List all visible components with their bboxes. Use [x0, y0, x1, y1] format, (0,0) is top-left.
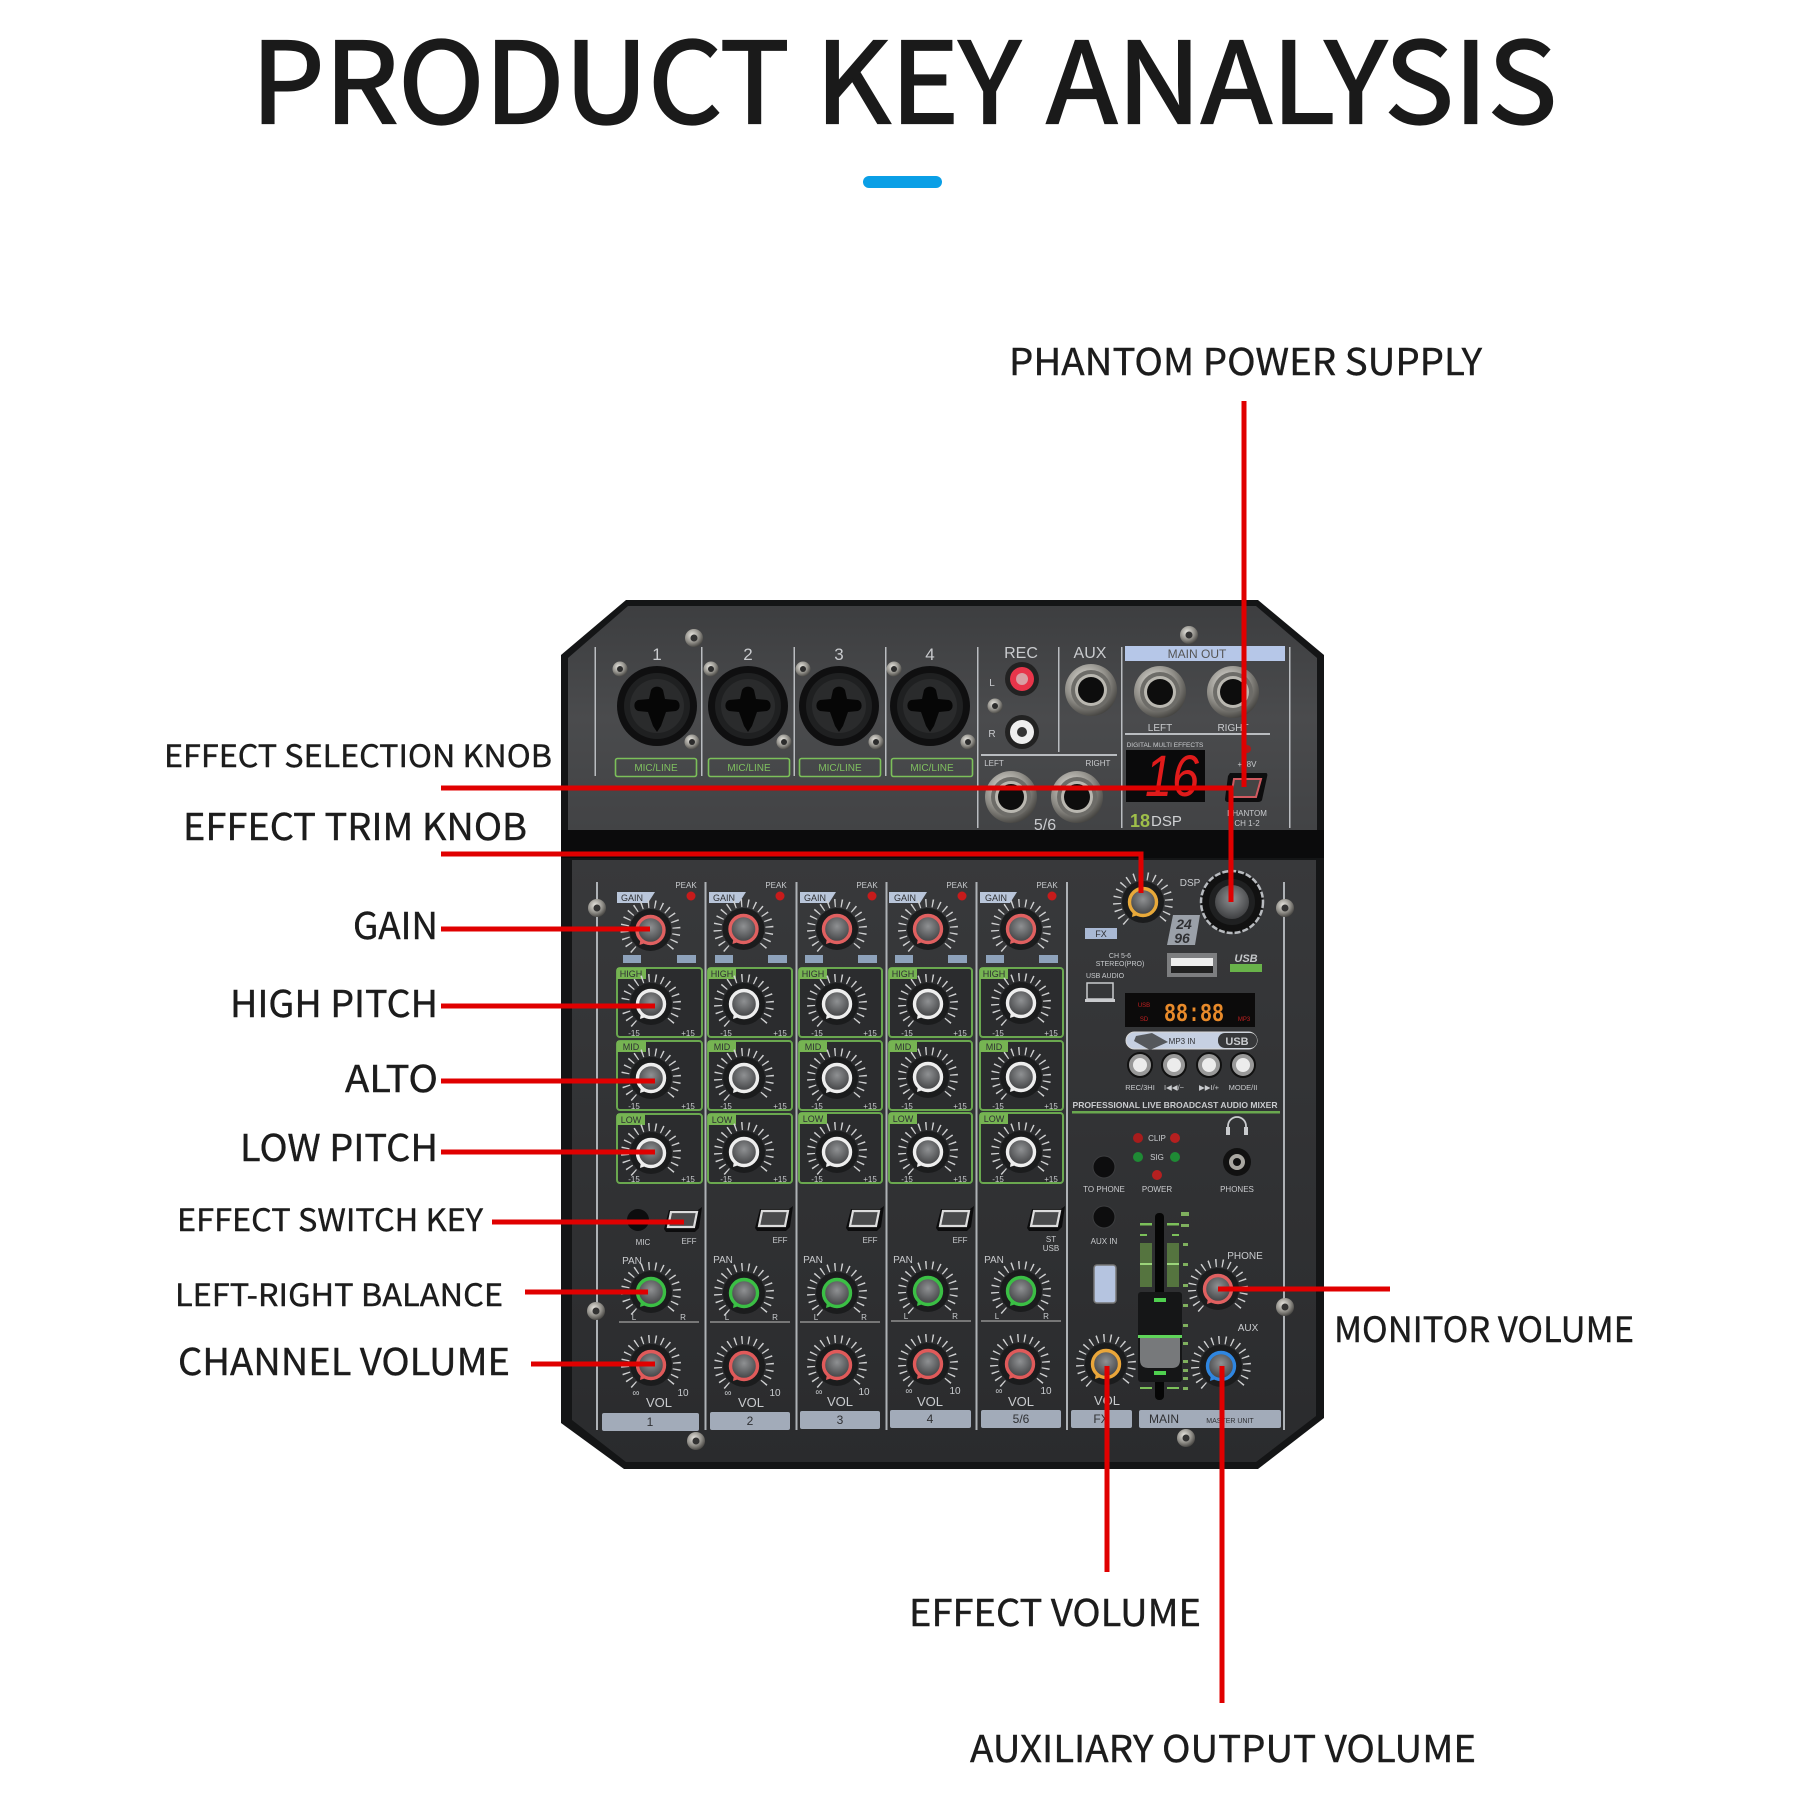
callout line: effect switch key [492, 1220, 684, 1224]
channel strip 1: 1 [647, 1415, 654, 1429]
USB audio block: USB AUDIO [1086, 973, 1125, 980]
channel strip 1 [602, 881, 702, 1431]
FX and MAIN chips: MAIN [1149, 1412, 1179, 1426]
channel strip 4: -15 [901, 1175, 913, 1184]
control panel rails [596, 882, 1285, 1430]
channel strip 3: GAIN [804, 893, 826, 903]
MP3 LED readout: 88:88 [1164, 999, 1224, 1029]
USB audio block: CH 5-6 [1109, 953, 1131, 960]
effect trim knob: FX [1095, 929, 1107, 939]
phantom power switch: CH 1-2 [1234, 819, 1260, 828]
input channel 1 jack [612, 645, 700, 776]
channel strip 3: EFF [862, 1236, 878, 1245]
main out jacks [1125, 646, 1285, 734]
channel strip 4: VOL [917, 1394, 943, 1409]
channel strip 1: GAIN [621, 893, 643, 903]
label: effect trim knob: EFFECT TRIM KNOB [183, 797, 527, 851]
USB audio block: STEREO(PRO) [1096, 961, 1144, 968]
channel strip 5/6: R [1043, 1312, 1049, 1321]
channel strip 2: R [772, 1313, 778, 1322]
MP3 LED readout: MP3 [1238, 1017, 1251, 1023]
channel strip 4 [889, 881, 974, 1428]
USB audio block: USB [1234, 953, 1258, 965]
phantom power switch [1225, 745, 1267, 828]
channel strip 5/6: 5/6 [1013, 1412, 1030, 1426]
player buttons: ▶▶I/+ [1199, 1083, 1220, 1092]
label: auxiliary output volume: AUXILIARY OUTPUT VOLUME [970, 1719, 1476, 1773]
channel strip 3: R [861, 1313, 867, 1322]
channel strip 1: VOL [646, 1395, 672, 1410]
REC RCA outputs: R [988, 729, 996, 740]
callout line: effect volume [1104, 1366, 1110, 1572]
label: effect switch key: EFFECT SWITCH KEY [177, 1195, 484, 1240]
title accent bar [863, 176, 942, 188]
DSP effect display [1126, 742, 1205, 831]
channel strip 2 [708, 881, 793, 1430]
aux volume knob: AUX [1238, 1323, 1259, 1334]
effect volume knob [1080, 1338, 1132, 1408]
input channel 4 jack: 4 [925, 645, 935, 664]
24/96 badge: 96 [1174, 930, 1190, 946]
channel strip 4: LOW [893, 1114, 914, 1124]
to phone jack [1083, 1156, 1125, 1194]
channel strip 1: ∞ [632, 1388, 640, 1399]
callout line: left-right balance [525, 1290, 648, 1294]
top screws [685, 626, 1198, 647]
channel strip 2: +15 [773, 1102, 787, 1111]
callout line: phantom power supply [1242, 401, 1246, 787]
channel strip 4: 4 [927, 1412, 934, 1426]
input channel 4 jack: MIC/LINE [910, 763, 954, 774]
panel screws [587, 899, 1294, 1450]
channel strip 4: +15 [953, 1029, 967, 1038]
channel strip 2: HIGH [711, 969, 733, 979]
aux in jack [1091, 1206, 1118, 1246]
channel strip 2: GAIN [713, 893, 735, 903]
channel strip 3 [799, 881, 884, 1429]
channel strip 2: L [725, 1313, 730, 1322]
channel strip 3: L [814, 1313, 819, 1322]
label: effect selection knob: EFFECT SELECTION KNOB [164, 731, 552, 776]
channel strip 2: PEAK [765, 881, 787, 890]
channel strip 5/6: USB [1043, 1244, 1059, 1253]
callout line: effect trim knob [441, 854, 1141, 893]
channel strip 4: EFF [952, 1236, 968, 1245]
MP3 USB mode pill: MP3 IN [1169, 1037, 1196, 1046]
control panel [572, 860, 1316, 1462]
input channel 3 jack: 3 [834, 645, 844, 664]
channel strip 5/6: +15 [1044, 1175, 1058, 1184]
channel strip 1: +15 [681, 1175, 695, 1184]
channel strip 1: HIGH [620, 969, 642, 979]
channel strip 2: -15 [720, 1102, 732, 1111]
label: gain: GAIN [353, 896, 438, 950]
input channel 1 jack: 1 [652, 645, 662, 664]
channel strip 5/6: MID [986, 1042, 1003, 1052]
status LEDs: POWER [1142, 1185, 1172, 1194]
24/96 badge [1167, 915, 1200, 946]
MP3 LED readout: SD [1140, 1017, 1149, 1023]
MP3 LED readout [1125, 993, 1255, 1029]
channel strip 4: PAN [893, 1255, 913, 1266]
phone icon [1094, 1265, 1116, 1303]
channel strip 1: MID [623, 1042, 640, 1052]
mixer product illustration [561, 600, 1324, 1469]
channel strip 5/6: -15 [992, 1029, 1004, 1038]
input channel 2 jack: MIC/LINE [727, 763, 771, 774]
channel strip 3: -15 [811, 1175, 823, 1184]
channel strip 2: VOL [738, 1395, 764, 1410]
channel strip 1: PAN [622, 1256, 642, 1267]
channel strip 1: +15 [681, 1029, 695, 1038]
top connector panel [568, 606, 1317, 830]
label: left-right balance: LEFT-RIGHT BALANCE [175, 1270, 503, 1315]
channel strip 2: ∞ [724, 1388, 732, 1399]
callout line: alto [441, 1078, 655, 1084]
main out jacks: LEFT [1148, 723, 1172, 734]
5/6 jacks: 5/6 [1034, 817, 1056, 834]
channel strip 2: EFF [772, 1236, 788, 1245]
channel strip 2: LOW [712, 1115, 733, 1125]
mixer body [561, 600, 1324, 1469]
input channel 3 jack: MIC/LINE [818, 763, 862, 774]
channel strip 3: MID [805, 1042, 822, 1052]
MP3 USB mode pill: USB [1225, 1036, 1249, 1048]
player buttons: MODE/II [1229, 1083, 1257, 1092]
channel strip 1: -15 [628, 1029, 640, 1038]
top panel dividers [594, 647, 1290, 828]
input channel 3 jack [796, 645, 884, 776]
channel strip 2: -15 [720, 1175, 732, 1184]
label: low pitch: LOW PITCH [240, 1118, 438, 1172]
channel strip 4: L [904, 1312, 909, 1321]
channel strip 2: 10 [769, 1388, 781, 1399]
channel strip 5/6: HIGH [983, 969, 1005, 979]
channel strip 1: -15 [628, 1175, 640, 1184]
player buttons: REC/3HI [1125, 1083, 1155, 1092]
FX and MAIN chips [1071, 1410, 1281, 1428]
main out jacks: RIGHT [1217, 723, 1249, 734]
channel strip 5/6: GAIN [985, 893, 1007, 903]
channel strip 5/6 [980, 881, 1065, 1428]
channel strip 5/6: VOL [1008, 1394, 1034, 1409]
AUX jack: AUX [1074, 645, 1107, 662]
channel strip 2: PAN [713, 1255, 733, 1266]
channel strip 5/6: +15 [1044, 1029, 1058, 1038]
effect selection knob: DSP [1180, 878, 1201, 889]
channel strip 4: 10 [949, 1386, 961, 1397]
channel strip 5/6: PEAK [1036, 881, 1058, 890]
FX and MAIN chips: MASTER UNIT [1206, 1418, 1254, 1425]
24/96 badge: 24 [1175, 916, 1192, 932]
headphones output [1220, 1117, 1254, 1194]
player buttons: I◀◀/− [1164, 1083, 1185, 1092]
status LEDs: SIG [1150, 1153, 1164, 1162]
channel strip 4: MID [895, 1042, 912, 1052]
channel strip 4: -15 [901, 1102, 913, 1111]
5/6 jacks: RIGHT [1086, 759, 1111, 768]
callout line: monitor volume [1218, 1286, 1390, 1292]
channel strip 5/6: -15 [992, 1175, 1004, 1184]
5/6 jacks [984, 759, 1111, 834]
channel strip 4: R [952, 1312, 958, 1321]
channel strip 1: +15 [681, 1102, 695, 1111]
aux in jack: AUX IN [1091, 1237, 1118, 1246]
callout line: auxiliary output volume [1220, 1366, 1224, 1703]
channel strip 4: +15 [953, 1102, 967, 1111]
DSP effect display: 18 [1130, 811, 1150, 831]
DSP effect display: 16 [1145, 744, 1200, 809]
dark shelf band [561, 830, 1324, 858]
channel strip 3: +15 [863, 1029, 877, 1038]
channel strip 5/6: ST [1046, 1235, 1056, 1244]
label: channel volume: CHANNEL VOLUME [178, 1332, 510, 1386]
MP3 USB mode pill [1126, 1032, 1257, 1050]
DSP effect display: DSP [1151, 813, 1182, 830]
channel strip 1: LOW [621, 1115, 642, 1125]
channel strip 4: PEAK [946, 881, 968, 890]
channel strip 3: HIGH [802, 969, 824, 979]
callout line: gain [441, 926, 650, 932]
REC RCA outputs [988, 645, 1039, 749]
label: phantom power supply: PHANTOM POWER SUPPLY [1009, 332, 1482, 386]
aux volume knob [1195, 1323, 1259, 1392]
effect selection knob [1180, 871, 1263, 933]
channel strip 1: -15 [628, 1102, 640, 1111]
channel strip 3: +15 [863, 1102, 877, 1111]
status LEDs [1133, 1133, 1180, 1194]
channel strip 2: -15 [720, 1029, 732, 1038]
channel strip 3: PAN [803, 1255, 823, 1266]
channel strip 4: HIGH [892, 969, 914, 979]
channel strip 2: 2 [747, 1414, 754, 1428]
channel strip 3: -15 [811, 1029, 823, 1038]
input channel 1 jack: MIC/LINE [634, 763, 678, 774]
channel strip 1: 10 [677, 1388, 689, 1399]
label: effect volume: EFFECT VOLUME [909, 1583, 1201, 1637]
phantom power switch: +48V [1238, 760, 1257, 769]
effect volume knob: VOL [1094, 1393, 1120, 1408]
label: high pitch: HIGH PITCH [230, 974, 438, 1028]
headphones output: PHONES [1220, 1185, 1254, 1194]
channel strip 1: EFF [681, 1237, 697, 1246]
level meter and fader [1138, 1212, 1189, 1400]
channel strip 2: +15 [773, 1029, 787, 1038]
main out jacks: MAIN OUT [1168, 647, 1227, 661]
channel strip 3: -15 [811, 1102, 823, 1111]
channel strip 3: LOW [803, 1114, 824, 1124]
DSP effect display: DIGITAL MULTI EFFECTS [1127, 742, 1204, 749]
channel strip 1: PEAK [675, 881, 697, 890]
channel strip 5/6: PAN [984, 1255, 1004, 1266]
product name strip: PROFESSIONAL LIVE BROADCAST AUDIO MIXER [1072, 1100, 1278, 1110]
callout line: low pitch [441, 1150, 655, 1154]
channel strip 5/6: ∞ [995, 1386, 1003, 1397]
channel strip 3: PEAK [856, 881, 878, 890]
to phone jack: TO PHONE [1083, 1185, 1125, 1194]
input channel 4 jack [886, 645, 976, 776]
input channel 2 jack: 2 [743, 645, 753, 664]
MP3 LED readout: USB [1138, 1003, 1150, 1009]
monitor volume knob: PHONE [1227, 1251, 1263, 1262]
callout line: channel volume [531, 1362, 655, 1366]
channel strip 2: +15 [773, 1175, 787, 1184]
effect trim knob [1085, 876, 1169, 939]
REC RCA outputs: REC [1004, 645, 1038, 662]
channel strip 4: ∞ [905, 1386, 913, 1397]
channel strip 3: +15 [863, 1175, 877, 1184]
monitor volume knob [1192, 1251, 1263, 1315]
channel strip 5/6: 10 [1040, 1386, 1052, 1397]
USB audio block [1085, 953, 1262, 1002]
channel strip 3: 3 [837, 1413, 844, 1427]
input channel 2 jack [704, 645, 792, 776]
channel strip 5/6: L [995, 1312, 1000, 1321]
player buttons [1125, 1053, 1257, 1092]
channel strip 5/6: +15 [1044, 1102, 1058, 1111]
channel strip 4: +15 [953, 1175, 967, 1184]
REC RCA outputs: L [989, 678, 995, 689]
status LEDs: CLIP [1148, 1134, 1166, 1143]
channel strip 3: 10 [858, 1387, 870, 1398]
AUX jack [1065, 645, 1117, 716]
channel strip 2: MID [714, 1042, 731, 1052]
phantom power switch: PHANTOM [1227, 809, 1267, 818]
channel strip 1: MIC [636, 1238, 651, 1247]
callout line: high pitch [441, 1004, 655, 1008]
callout line: effect selection knob [441, 788, 1231, 902]
label: monitor volume: MONITOR VOLUME [1334, 1302, 1634, 1353]
label: alto: ALTO [345, 1049, 438, 1103]
channel strip 4: GAIN [894, 893, 916, 903]
channel strip 4: -15 [901, 1029, 913, 1038]
channel strip 5/6: -15 [992, 1102, 1004, 1111]
FX and MAIN chips: FX [1093, 1412, 1109, 1426]
channel strip 1: R [680, 1313, 686, 1322]
channel strip 1: L [632, 1313, 637, 1322]
channel strip 3: VOL [827, 1394, 853, 1409]
channel strip 5/6: LOW [984, 1114, 1005, 1124]
5/6 jacks: LEFT [984, 759, 1004, 768]
channel strip 3: ∞ [815, 1387, 823, 1398]
